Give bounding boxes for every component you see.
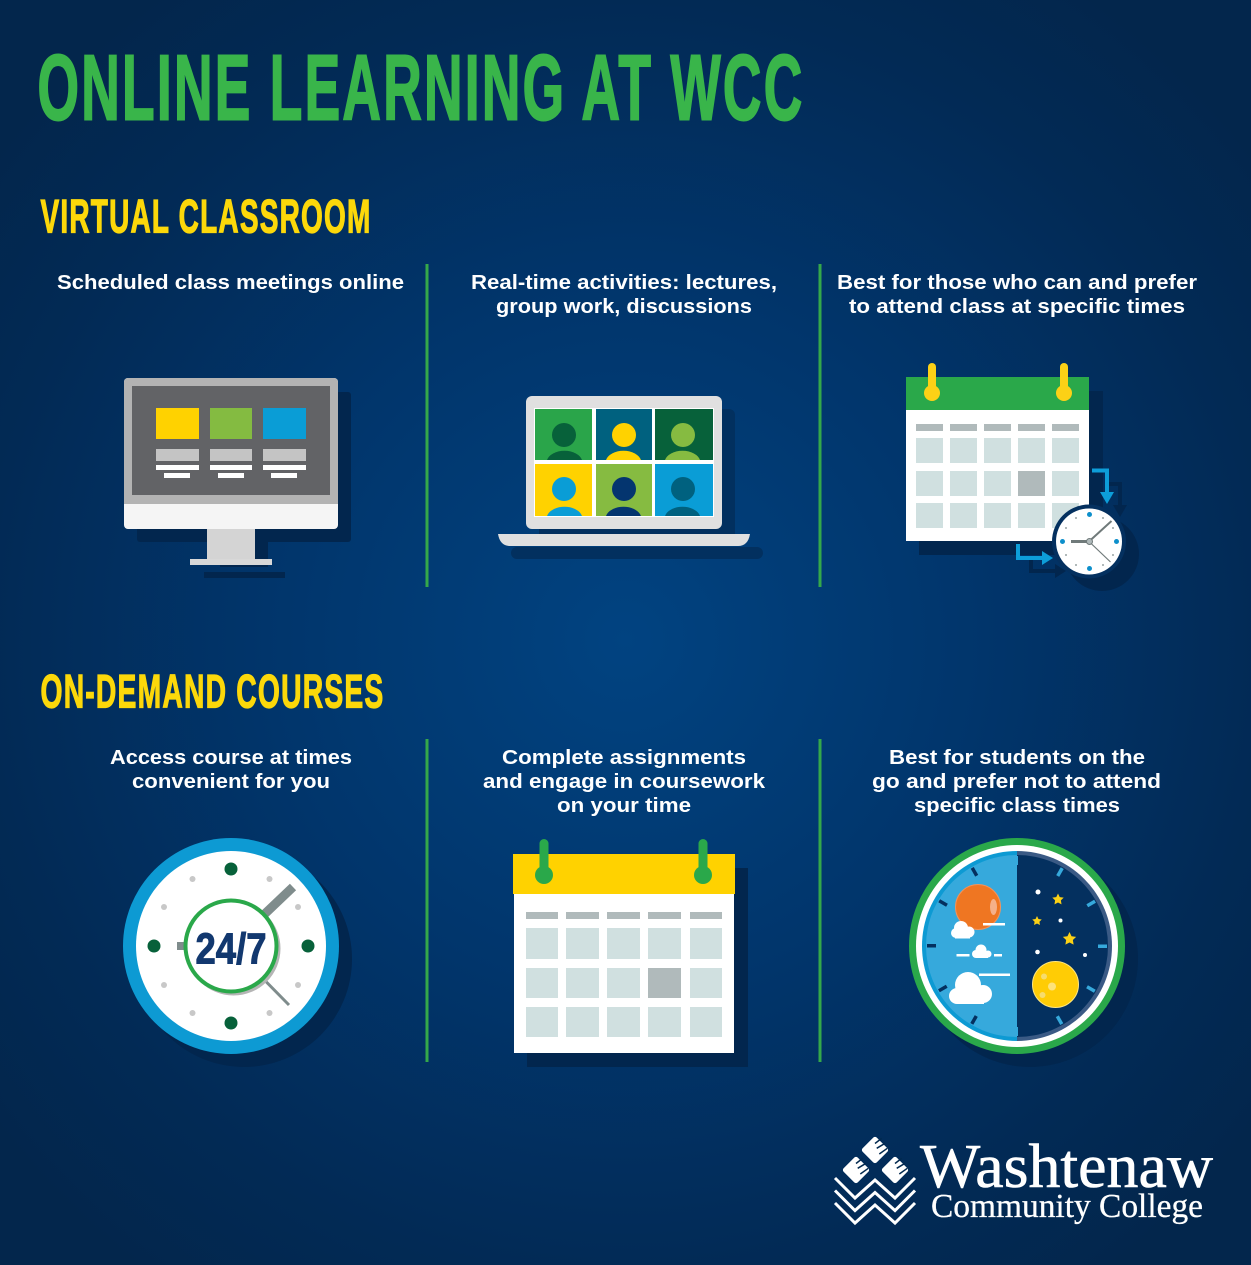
text block: access course: Access course at times [110, 746, 352, 769]
text block: complete assignments: on your time [557, 794, 691, 817]
icon: laptop with video call [498, 396, 763, 559]
text block: best for students on the go [872, 746, 1161, 817]
text block: real-time activities: group work, discussions [496, 295, 752, 318]
text block: complete assignments: and engage in coursework [483, 770, 766, 793]
text block: real-time activities: Real-time activities: lectures, [471, 271, 777, 294]
stars [1032, 890, 1087, 957]
moon [1032, 962, 1078, 1008]
logo wordmark: Washtenaw [920, 1133, 1213, 1201]
logo mark [835, 1136, 915, 1223]
text block: access course: convenient for you [132, 770, 330, 793]
text block: real-time activities [471, 271, 777, 318]
sun [956, 884, 1000, 930]
24/7 label: 24/7 [196, 924, 266, 974]
text block: best for students on the go: Best for students on the [889, 746, 1145, 769]
text block: scheduled class meetings: Scheduled class meetings online [57, 271, 404, 294]
icon: yellow calendar [513, 839, 748, 1067]
text block: complete assignments [483, 746, 766, 817]
icon: 24/7 clock [123, 838, 352, 1067]
heading: virtual classroom: VIRTUAL CLASSROOM [40, 190, 372, 242]
clouds and lines [949, 921, 1010, 1004]
text block: access course [110, 746, 352, 793]
heading: on-demand courses: ON-DEMAND COURSES [40, 664, 385, 718]
text block: complete assignments: Complete assignments [502, 746, 746, 769]
logo: Washtenaw Community College [835, 1133, 1213, 1225]
text block: best for those who attend at specific times: Best for those who can and prefer [837, 271, 1197, 294]
icon: day and night clock [909, 838, 1138, 1067]
text block: best for those who attend at specific times: to attend class at specific times [849, 295, 1185, 318]
text block: best for those who attend at specific times [837, 271, 1197, 318]
text block: best for students on the go: specific class times [914, 794, 1120, 817]
logo wordmark: Community College [931, 1188, 1203, 1225]
icon: calendar with clock and arrows [906, 363, 1139, 591]
text block: best for students on the go: go and prefer not to attend [872, 770, 1161, 793]
icon: desktop monitor [124, 378, 351, 578]
